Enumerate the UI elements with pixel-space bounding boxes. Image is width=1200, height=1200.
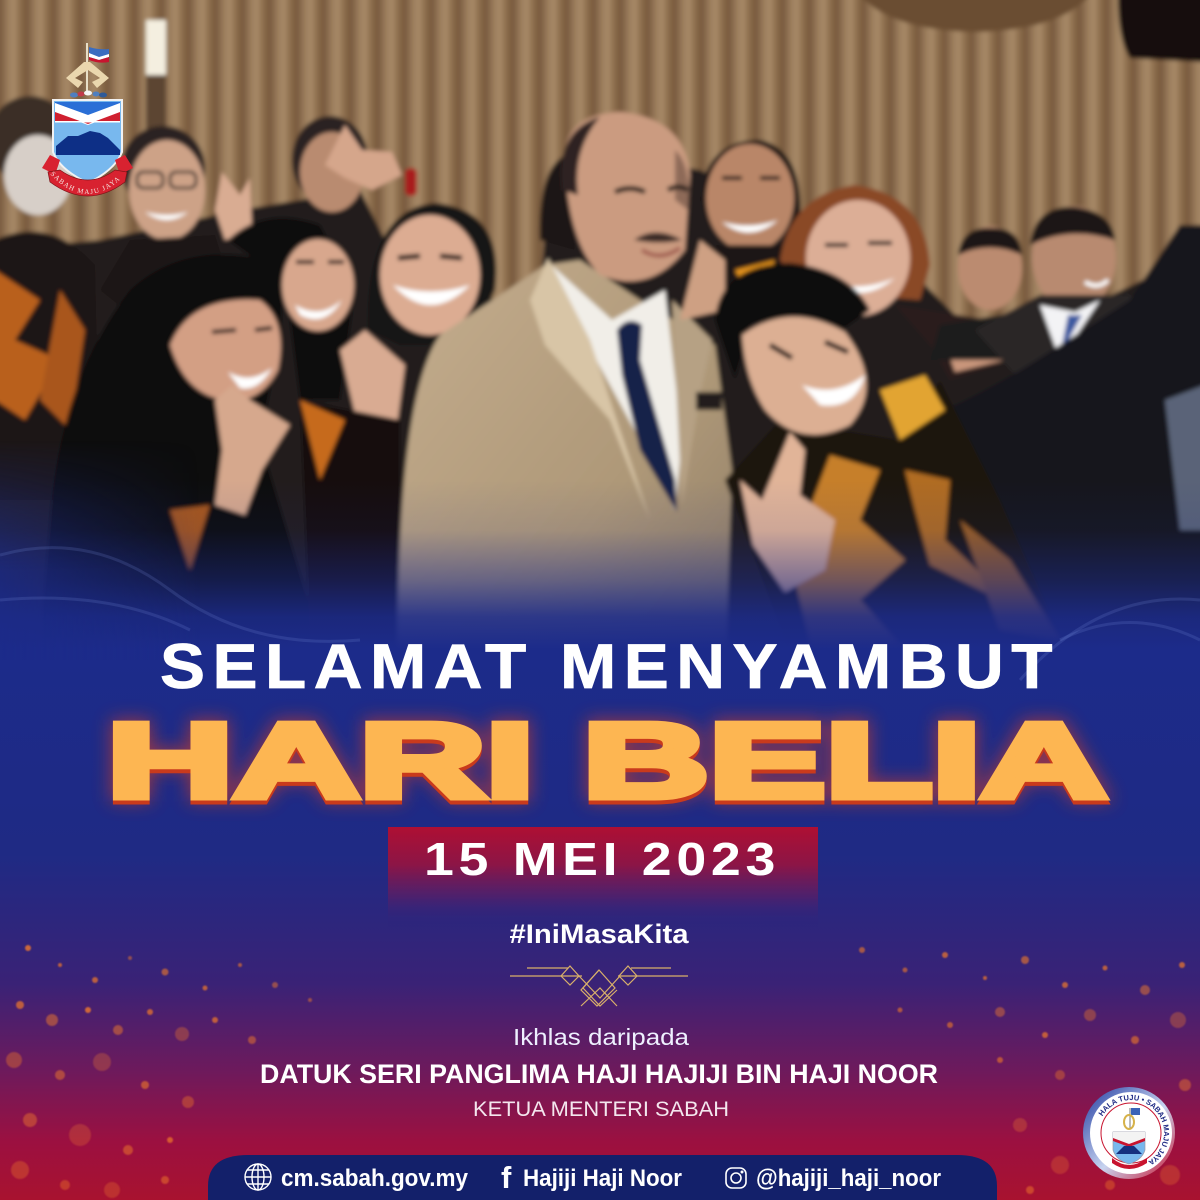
footer contact bar — [208, 1155, 997, 1200]
title: Hari Belia: HARI BELIA — [107, 702, 1107, 820]
person: masked man left — [0, 96, 100, 500]
sender block — [260, 1024, 938, 1121]
motto ribbon: SABAH MAJU JAYA — [50, 172, 120, 194]
ornament divider — [510, 966, 688, 1006]
person: selfie boy with tiger jersey — [715, 263, 1080, 680]
crossed arms — [66, 62, 109, 88]
person: men in suits right — [930, 206, 1160, 380]
icon: globe — [245, 1164, 271, 1190]
person: front hijab woman — [40, 254, 320, 640]
flag pole and flag — [86, 43, 109, 93]
photo: group of youth athletes with chief minister — [0, 0, 1200, 720]
name: DATUK SERI PANGLIMA HAJI HAJIJI BIN HAJI NOOR — [260, 1059, 938, 1089]
person: chief minister in tan suit — [398, 112, 732, 680]
facebook name: Hajiji Haji Noor — [523, 1165, 682, 1192]
bokeh particles — [6, 945, 1191, 1198]
person: smiling girl with black hair — [368, 203, 496, 345]
person: short haired woman — [680, 140, 800, 320]
mountain — [56, 131, 120, 155]
person: man in dark suit with peace hand — [215, 116, 417, 290]
badge: Hala Tuju Sabah Maju Jaya: HALA TUJU • SABAH MAJU JAYA — [1098, 1094, 1170, 1164]
person: auburn haired woman — [780, 185, 1005, 380]
phone top right — [1118, 0, 1200, 62]
title: Hari Belia: HARI BELIA — [107, 706, 1107, 824]
person: second hijab woman — [228, 218, 405, 640]
person behind chief minister — [540, 155, 575, 250]
date banner: 15 MEI 2023 — [424, 833, 780, 885]
hashtag: #IniMasaKita — [510, 919, 690, 949]
person: man with glasses — [100, 126, 235, 330]
curtain backdrop — [0, 0, 1200, 715]
dark crowd mass — [0, 150, 1200, 720]
icon: instagram — [726, 1168, 746, 1188]
motto ribbon — [42, 155, 133, 196]
person: selfie arm in black jacket — [945, 225, 1200, 680]
website: cm.sabah.gov.my — [281, 1165, 469, 1192]
background wave lines — [0, 548, 1200, 680]
title: Hari Belia — [107, 702, 1107, 824]
decorative colour fade — [0, 480, 1200, 1200]
title: Hari Belia: HARI BELIA — [107, 702, 1107, 820]
instagram handle: @hajiji_haji_noor — [756, 1165, 941, 1192]
heading: Selamat Menyambut: SELAMAT MENYAMBUT — [160, 632, 1060, 702]
Ikhlas daripada: Ikhlas daripada — [513, 1024, 689, 1050]
icon: facebook: f — [501, 1160, 512, 1195]
badge: Hala Tuju Sabah Maju Jaya — [1083, 1087, 1175, 1179]
role: KETUA MENTERI SABAH — [473, 1098, 729, 1121]
shield — [53, 100, 122, 183]
date banner — [388, 827, 818, 927]
logo: Sabah state crest — [42, 43, 133, 196]
beads under arms — [70, 90, 107, 98]
